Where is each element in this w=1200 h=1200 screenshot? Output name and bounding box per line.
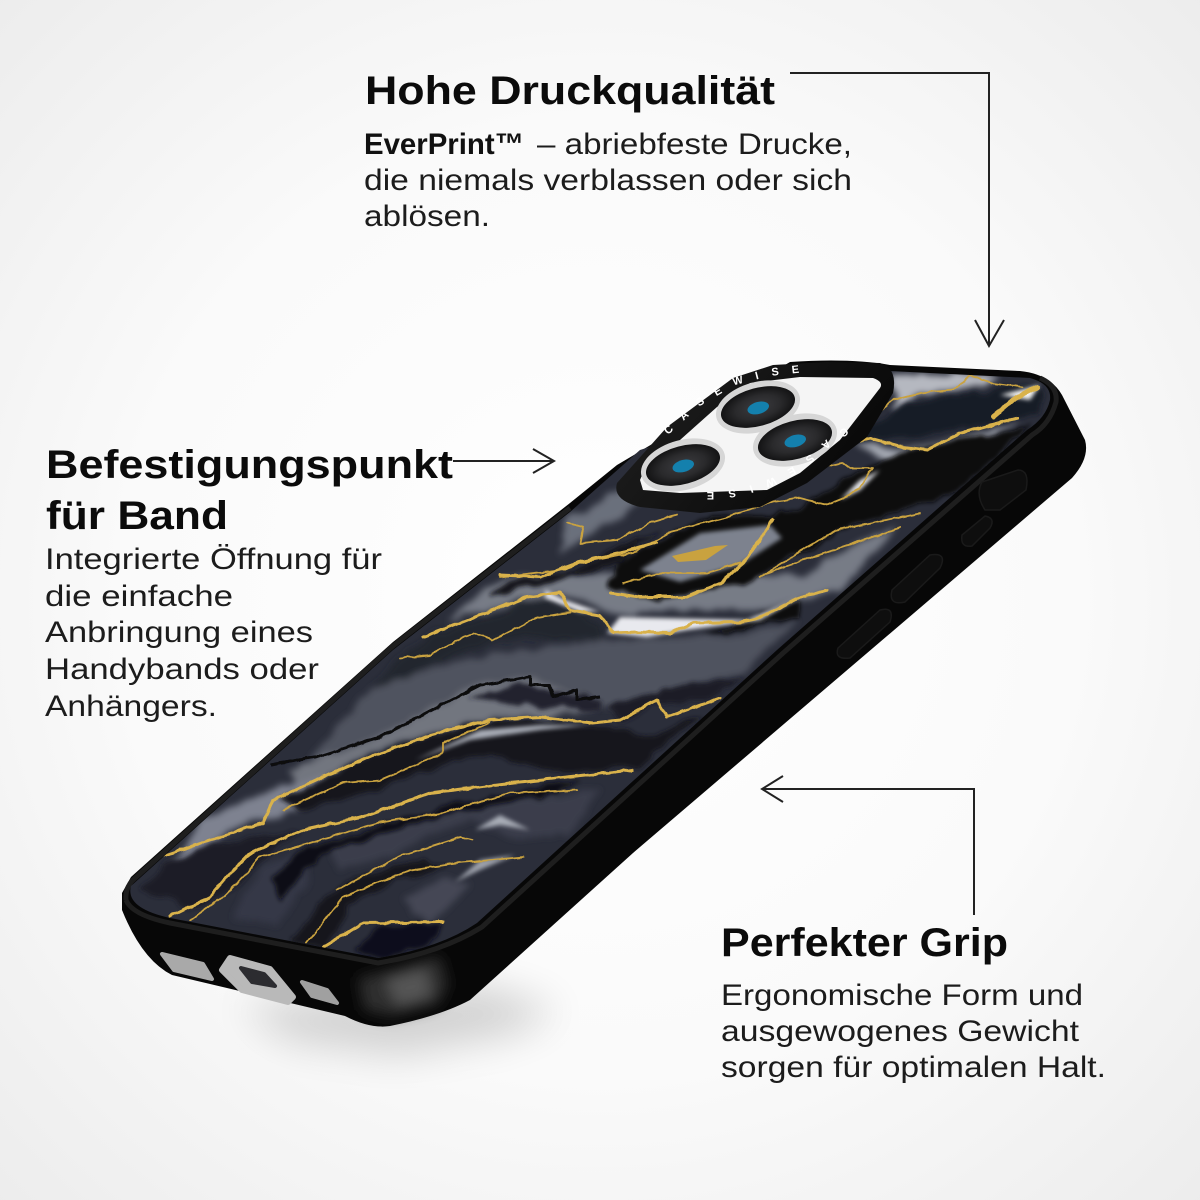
charging port hole (241, 968, 275, 986)
body copy (45, 543, 382, 723)
dark bands (140, 385, 1045, 960)
text block: Hohe Druckqualität (364, 69, 852, 233)
white streaks (415, 385, 1040, 882)
case bottom wall highlight (358, 956, 448, 1016)
arrow: strap attachment point (453, 449, 554, 473)
body copy: Integrierte Öffnung für (45, 543, 382, 576)
body copy (364, 128, 852, 233)
heading: Befestigungspunkt (46, 443, 453, 487)
body copy (721, 979, 1106, 1084)
body copy: Handybands oder (45, 653, 319, 686)
body copy: Anbringung eines (45, 616, 313, 649)
speaker left (162, 954, 212, 979)
agate eye (640, 525, 782, 582)
gray bands (160, 374, 1020, 927)
arrow: print quality to case top (790, 73, 1004, 346)
camera ring (616, 362, 894, 513)
speaker right (302, 982, 337, 1003)
text block: Perfekter Grip (721, 921, 1106, 1084)
lens: right (747, 405, 843, 475)
heading (46, 443, 453, 538)
ports (162, 954, 337, 1003)
heading: Hohe Druckqualität (365, 69, 775, 113)
body copy: ablösen. (364, 200, 490, 233)
charging port (222, 958, 293, 1002)
glossy rim (126, 378, 1056, 963)
case silhouette (122, 361, 1086, 1027)
body copy: sorgen für optimalen Halt. (721, 1051, 1106, 1084)
body copy: – abriebfeste Drucke, (537, 128, 852, 161)
phone case (122, 360, 1086, 1027)
marble print (120, 360, 1070, 970)
heading: Perfekter Grip (721, 921, 1008, 965)
ring text top: CASEWISE (664, 365, 799, 434)
phone shadow (240, 985, 560, 1055)
arrow: grip to case side (762, 776, 974, 915)
side buttons (837, 470, 1027, 658)
gold veins (160, 375, 1037, 947)
body copy: die einfache (45, 580, 233, 613)
body copy: Anhängers. (45, 690, 217, 723)
lens: left (635, 430, 731, 500)
body copy: ausgewogenes Gewicht (721, 1015, 1080, 1048)
camera plate (640, 377, 881, 493)
heading: für Band (46, 494, 228, 538)
body copy: EverPrint™ (364, 128, 524, 161)
lens: top (710, 372, 806, 442)
body copy: die niemals verblassen oder sich (364, 164, 852, 197)
text block: Befestigungspunkt (45, 443, 453, 723)
ring text bottom: CASEWISE (707, 428, 848, 500)
body copy: Ergonomische Form und (721, 979, 1083, 1012)
